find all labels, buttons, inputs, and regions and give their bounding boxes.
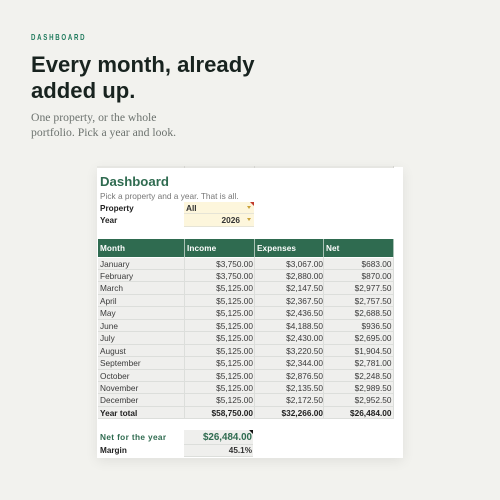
subtitle: portfolio. Pick a year and look. (31, 126, 176, 139)
table rows: $2,781.00 (355, 358, 392, 368)
table rows: $870.00 (362, 271, 392, 281)
table rows: $5,125.00 (216, 395, 253, 405)
subtitle (31, 111, 176, 139)
table rows: $2,757.50 (355, 296, 392, 306)
table rows: March (100, 283, 123, 293)
table rows: $2,695.00 (355, 333, 392, 343)
table rows: $2,344.00 (286, 358, 323, 368)
table rows: $2,436.50 (286, 308, 323, 318)
year dropdown: 2026 (222, 215, 240, 225)
table rows: December (100, 395, 138, 405)
property label: Property (100, 204, 134, 213)
panel: spreadsheet dashboard (97, 167, 403, 458)
net for the year label: Net for the year (100, 432, 166, 442)
eyebrow label: DASHBOARD (31, 32, 86, 42)
subtitle: One property, or the whole (31, 111, 156, 124)
table rows: $5,125.00 (216, 346, 253, 356)
table rows: $5,125.00 (216, 308, 253, 318)
sheet heading: Dashboard (100, 174, 169, 189)
table rows: $32,266.00 (281, 408, 323, 418)
table rows: $1,904.50 (355, 346, 392, 356)
net for the year value (184, 430, 253, 445)
table rows: $2,880.00 (286, 271, 323, 281)
table rows: $3,750.00 (216, 258, 253, 268)
table rows: $4,188.50 (286, 321, 323, 331)
table rows: September (100, 358, 141, 368)
table rows: $5,125.00 (216, 371, 253, 381)
table rows: $2,688.50 (355, 308, 392, 318)
table rows: February (100, 271, 133, 281)
table header: Net (326, 244, 340, 253)
net for the year value: $26,484.00 (203, 432, 252, 443)
title: added up. (31, 78, 135, 103)
table rows: $2,147.50 (286, 283, 323, 293)
table rows: $5,125.00 (216, 383, 253, 393)
table rows: $2,135.50 (286, 383, 323, 393)
table rows: $5,125.00 (216, 321, 253, 331)
property dropdown (184, 202, 254, 214)
table rows: January (100, 258, 130, 268)
table rows: $2,977.50 (355, 283, 392, 293)
table rows: $5,125.00 (216, 358, 253, 368)
table rows: $936.50 (362, 321, 392, 331)
margin value (184, 445, 253, 457)
title: Every month, already (31, 52, 254, 77)
table rows: $3,220.50 (286, 346, 323, 356)
table rows: October (100, 371, 130, 381)
table rows: $5,125.00 (216, 333, 253, 343)
top grid ticks (97, 166, 393, 168)
table rows: $683.00 (362, 258, 392, 268)
table rows: $2,367.50 (286, 296, 323, 306)
property dropdown: All (186, 203, 197, 213)
sheet subtitle: Pick a property and a year. That is all. (100, 191, 239, 201)
year dropdown (184, 214, 254, 227)
table rows: $5,125.00 (216, 283, 253, 293)
table rows: $2,989.50 (355, 383, 392, 393)
table rows: $3,750.00 (216, 271, 253, 281)
table rows: April (100, 296, 117, 306)
table rows: $2,172.50 (286, 395, 323, 405)
table header: Month (100, 244, 125, 253)
monthly table (98, 239, 394, 419)
margin value: 45.1% (229, 446, 252, 455)
title (31, 52, 254, 103)
table rows: Year total (100, 408, 137, 418)
table rows: May (100, 308, 116, 318)
table header (98, 239, 394, 257)
margin label: Margin (100, 446, 127, 455)
table rows: $5,125.00 (216, 296, 253, 306)
table rows: $2,952.50 (355, 395, 392, 405)
year label: Year (100, 216, 117, 225)
table rows: $58,750.00 (211, 408, 253, 418)
table rows: $2,876.50 (286, 371, 323, 381)
table rows: $3,067.00 (286, 258, 323, 268)
table rows: August (100, 346, 126, 356)
table rows (98, 257, 394, 419)
table rows: November (100, 383, 138, 393)
table header: Income (187, 244, 216, 253)
table rows: $26,484.00 (350, 408, 392, 418)
table rows: June (100, 321, 118, 331)
table rows: $2,430.00 (286, 333, 323, 343)
table rows: July (100, 333, 115, 343)
table header: Expenses (257, 244, 296, 253)
table rows: $2,248.50 (355, 371, 392, 381)
